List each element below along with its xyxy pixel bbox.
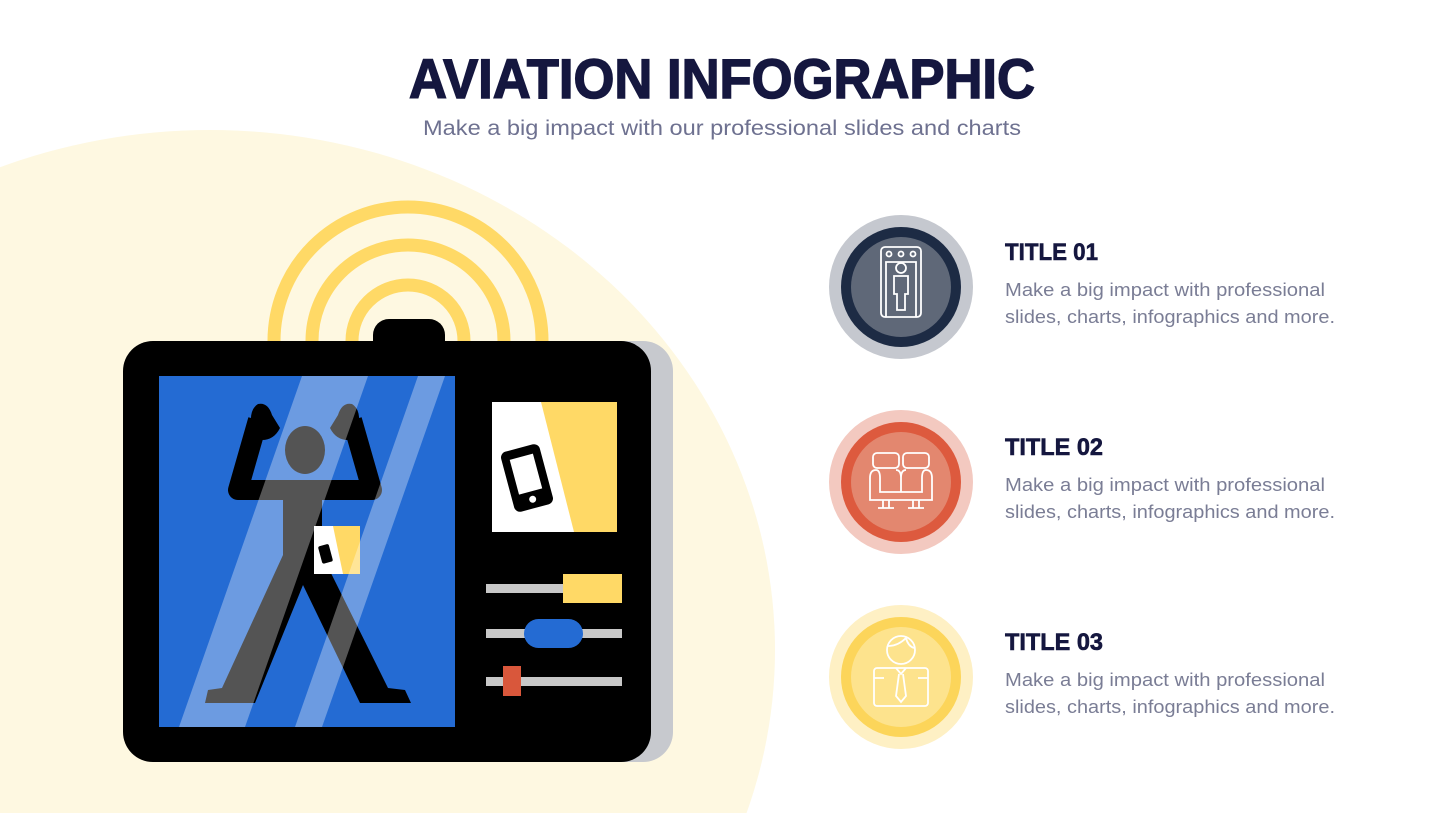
item 1: slides, charts, infographics and more.	[1005, 307, 1335, 327]
text 1: TITLE 01	[1005, 239, 1098, 266]
item 3	[829, 605, 1335, 749]
icon: officer	[829, 605, 973, 749]
item 2: Make a big impact with professional	[1005, 475, 1325, 495]
device scanner	[123, 319, 673, 762]
item 2: slides, charts, infographics and more.	[1005, 502, 1335, 522]
text 3: TITLE 03	[1005, 629, 1103, 656]
subtitle: Make a big impact with our professional slides and charts	[423, 117, 1021, 140]
icon: security scanner	[829, 215, 973, 359]
item 1: Make a big impact with professional	[1005, 280, 1325, 300]
title: AVIATION INFOGRAPHIC	[409, 47, 1035, 110]
item 2	[829, 410, 1335, 554]
text 2: TITLE 02	[1005, 434, 1103, 461]
screen with person	[159, 376, 455, 727]
icon: seats	[829, 410, 973, 554]
phone panel	[492, 402, 617, 532]
person silhouette	[205, 404, 411, 703]
item 1	[829, 215, 1335, 359]
tag on person	[314, 526, 360, 574]
sliders	[486, 574, 622, 696]
item 3: Make a big impact with professional	[1005, 670, 1325, 690]
item 3: slides, charts, infographics and more.	[1005, 697, 1335, 717]
icon: signal arcs	[274, 207, 542, 341]
background blob	[0, 130, 775, 813]
